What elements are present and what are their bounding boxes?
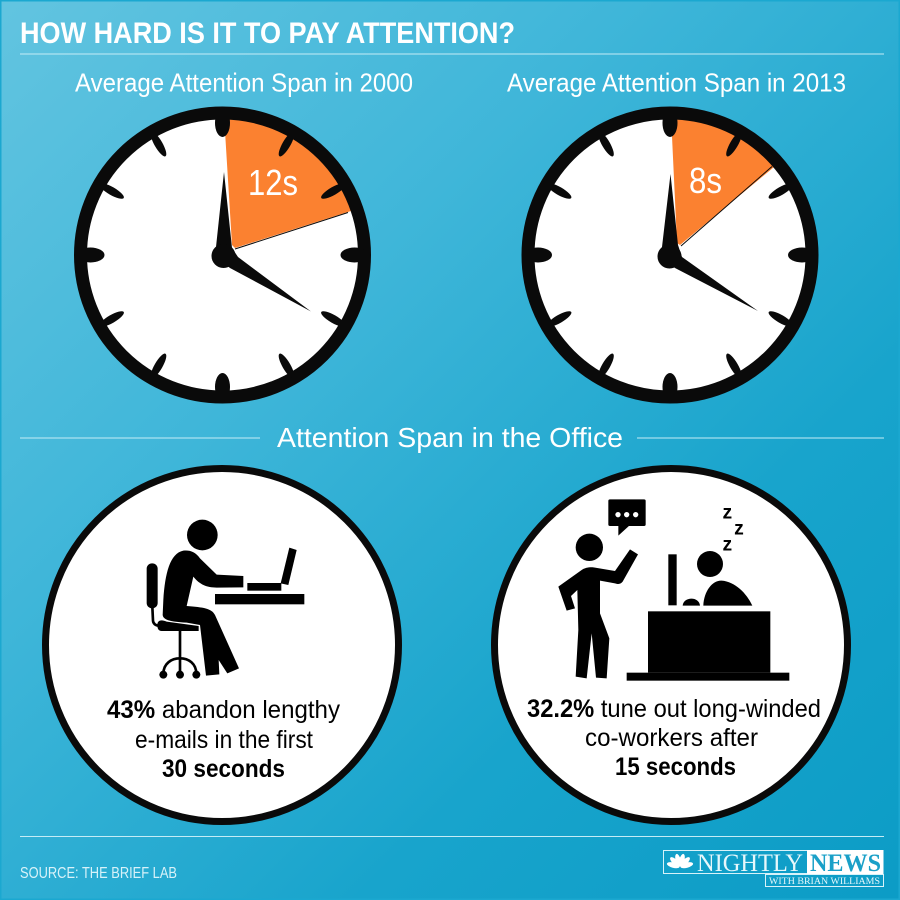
- clock: 2000, 12 seconds: 12s: [248, 162, 298, 203]
- panel: e-mail statistic: [46, 468, 398, 822]
- clock: 2013, 8 seconds: 8s: [689, 160, 722, 201]
- logo: Nightly News: [664, 850, 884, 887]
- text: co-worker statistic: 15 seconds: [615, 753, 736, 781]
- icon: person at laptop: [147, 520, 304, 679]
- clock: 2013, 8 seconds: [524, 109, 816, 401]
- text: e-mail statistic: 43% abandon lengthy: [107, 696, 340, 724]
- source note: SOURCE: THE BRIEF LAB: [20, 865, 177, 882]
- text: co-worker statistic: co-workers after: [585, 724, 758, 752]
- clock: 2000, 12 seconds: [76, 109, 368, 401]
- text: co-worker statistic: 32.2% tune out long-winded: [527, 695, 821, 723]
- text: e-mail statistic: [107, 696, 340, 783]
- icon: peacock: [666, 853, 694, 869]
- logo: Nightly News: NIGHTLY: [697, 850, 803, 877]
- heading: attention span 2013: Average Attention Span in 2013: [507, 68, 846, 98]
- logo: Nightly News: WITH BRIAN WILLIAMS: [769, 877, 880, 887]
- logo: Nightly News: NEWS: [810, 850, 881, 877]
- icon: talker and sleeping co-worker: z: [734, 518, 744, 539]
- panel: co-worker statistic: [494, 468, 848, 822]
- section heading: office: Attention Span in the Office: [277, 422, 623, 453]
- text: e-mail statistic: 30 seconds: [162, 755, 285, 783]
- heading: attention span 2000: Average Attention Span in 2000: [75, 68, 413, 98]
- icon: talker and sleeping co-worker: [558, 499, 789, 681]
- icon: talker and sleeping co-worker: z: [722, 534, 732, 555]
- title: HOW HARD IS IT TO PAY ATTENTION?: [20, 17, 515, 50]
- text: co-worker statistic: [527, 695, 821, 781]
- text: e-mail statistic: e-mails in the first: [135, 726, 313, 754]
- icon: talker and sleeping co-worker: z: [722, 502, 732, 523]
